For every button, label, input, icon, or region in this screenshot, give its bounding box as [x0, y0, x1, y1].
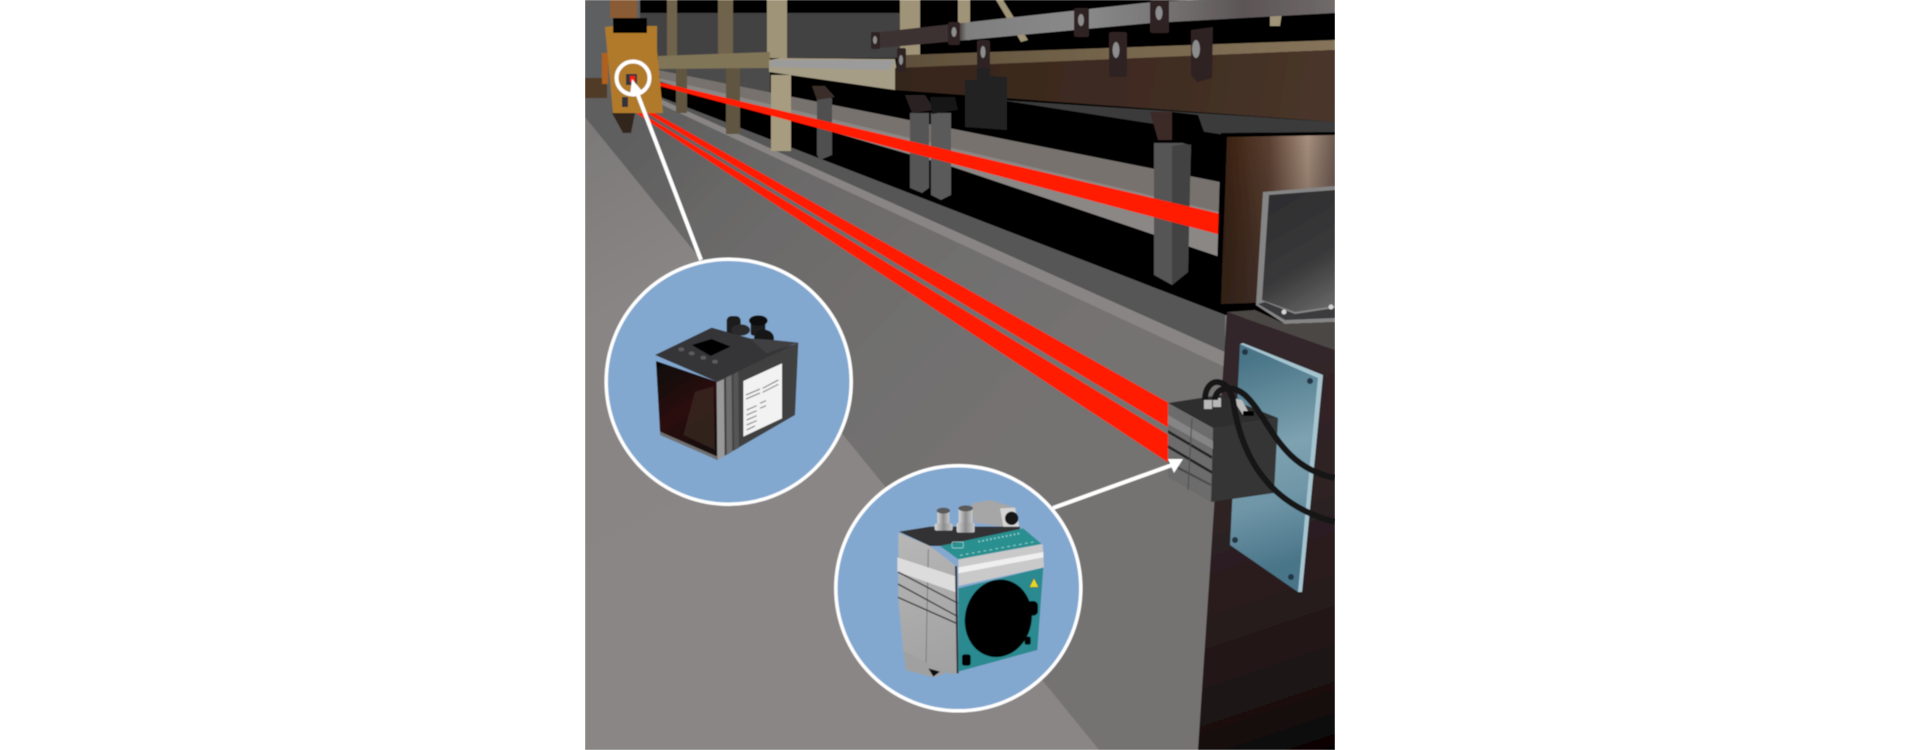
- device side bright band: [897, 557, 957, 593]
- light floor wedge: [585, 117, 1099, 750]
- device side: [717, 342, 798, 460]
- cables: [1205, 382, 1335, 522]
- callout circle: emitter sensor: [836, 466, 1081, 711]
- back wall dark area: [640, 0, 1335, 330]
- laser warning triangle: [1029, 578, 1039, 587]
- device top teal panel: [940, 528, 1042, 559]
- pedestal column: [1198, 312, 1335, 750]
- device display: [692, 339, 731, 356]
- angle plate: [1256, 186, 1335, 324]
- device buttons: [678, 347, 718, 364]
- pointer arrow to near sensor: [1053, 459, 1183, 508]
- dark support posts: [812, 86, 1204, 285]
- far sensor housing: [585, 0, 663, 133]
- second sensor window: [622, 97, 628, 107]
- blue mounting plate: [1230, 343, 1323, 592]
- tan rail right: [905, 40, 1335, 68]
- device label lines: [746, 380, 778, 430]
- device front window: [656, 361, 717, 460]
- right brown panel: [1221, 135, 1335, 304]
- housing top: [1168, 395, 1278, 428]
- device mounting slots: [962, 654, 971, 666]
- device side grooves: [898, 572, 958, 624]
- device side body: [898, 533, 958, 674]
- lower red laser beam two: [624, 103, 1169, 463]
- device connectors: [727, 315, 774, 347]
- clamp bolts: [873, 6, 1200, 65]
- upper red laser beam: [633, 76, 1221, 235]
- angled block: [972, 500, 1019, 527]
- device top dark: [899, 527, 1020, 546]
- brown main beam: [895, 50, 1335, 122]
- round connectors: [935, 505, 975, 533]
- floor shadow band: [655, 95, 1225, 354]
- near sensor housing: [1168, 395, 1278, 502]
- post bracket heads: [812, 86, 1204, 145]
- upper wall grey: [640, 13, 900, 58]
- callout circle: receiver sensor: [606, 259, 851, 504]
- hanging dark block: [965, 68, 1007, 130]
- housing rear block: [1211, 418, 1278, 502]
- device teal face: [958, 568, 1043, 672]
- tan rail left: [658, 52, 770, 69]
- illustration canvas: [585, 0, 1335, 750]
- device panel indicators: [952, 533, 1033, 555]
- side rail lower band: [658, 78, 1220, 257]
- lower red laser beam one: [627, 98, 1169, 428]
- device side ridges: [717, 379, 725, 460]
- pedestal top: [1227, 310, 1335, 350]
- far wall left: [585, 0, 645, 98]
- scene illustration: [585, 0, 1335, 750]
- side rail upper band: [658, 70, 1220, 214]
- cable connectors: [1204, 398, 1254, 416]
- silver beam: [769, 58, 897, 90]
- device top: [655, 328, 798, 382]
- wall shadow band: [1000, 100, 1335, 135]
- device foot: [903, 647, 947, 677]
- device lens: [958, 573, 1039, 663]
- grey area under left beam: [658, 68, 771, 92]
- floor: [585, 90, 1335, 750]
- far sensor callout ring: [616, 62, 650, 94]
- tan uprights: [667, 0, 1282, 151]
- curb strip: [658, 98, 1225, 367]
- rail clamps: [871, 0, 1213, 82]
- emitter device: [897, 500, 1044, 677]
- pointer arrow to far sensor: [630, 79, 701, 260]
- device label: [743, 363, 782, 437]
- housing front: [1168, 403, 1213, 502]
- silver beam top: [769, 60, 895, 70]
- device front bright band: [958, 544, 1044, 586]
- right dark backing panel: [1216, 132, 1335, 310]
- far sensor window: [626, 74, 637, 85]
- receiver device: [655, 315, 798, 460]
- silver rail upper: [880, 0, 1335, 48]
